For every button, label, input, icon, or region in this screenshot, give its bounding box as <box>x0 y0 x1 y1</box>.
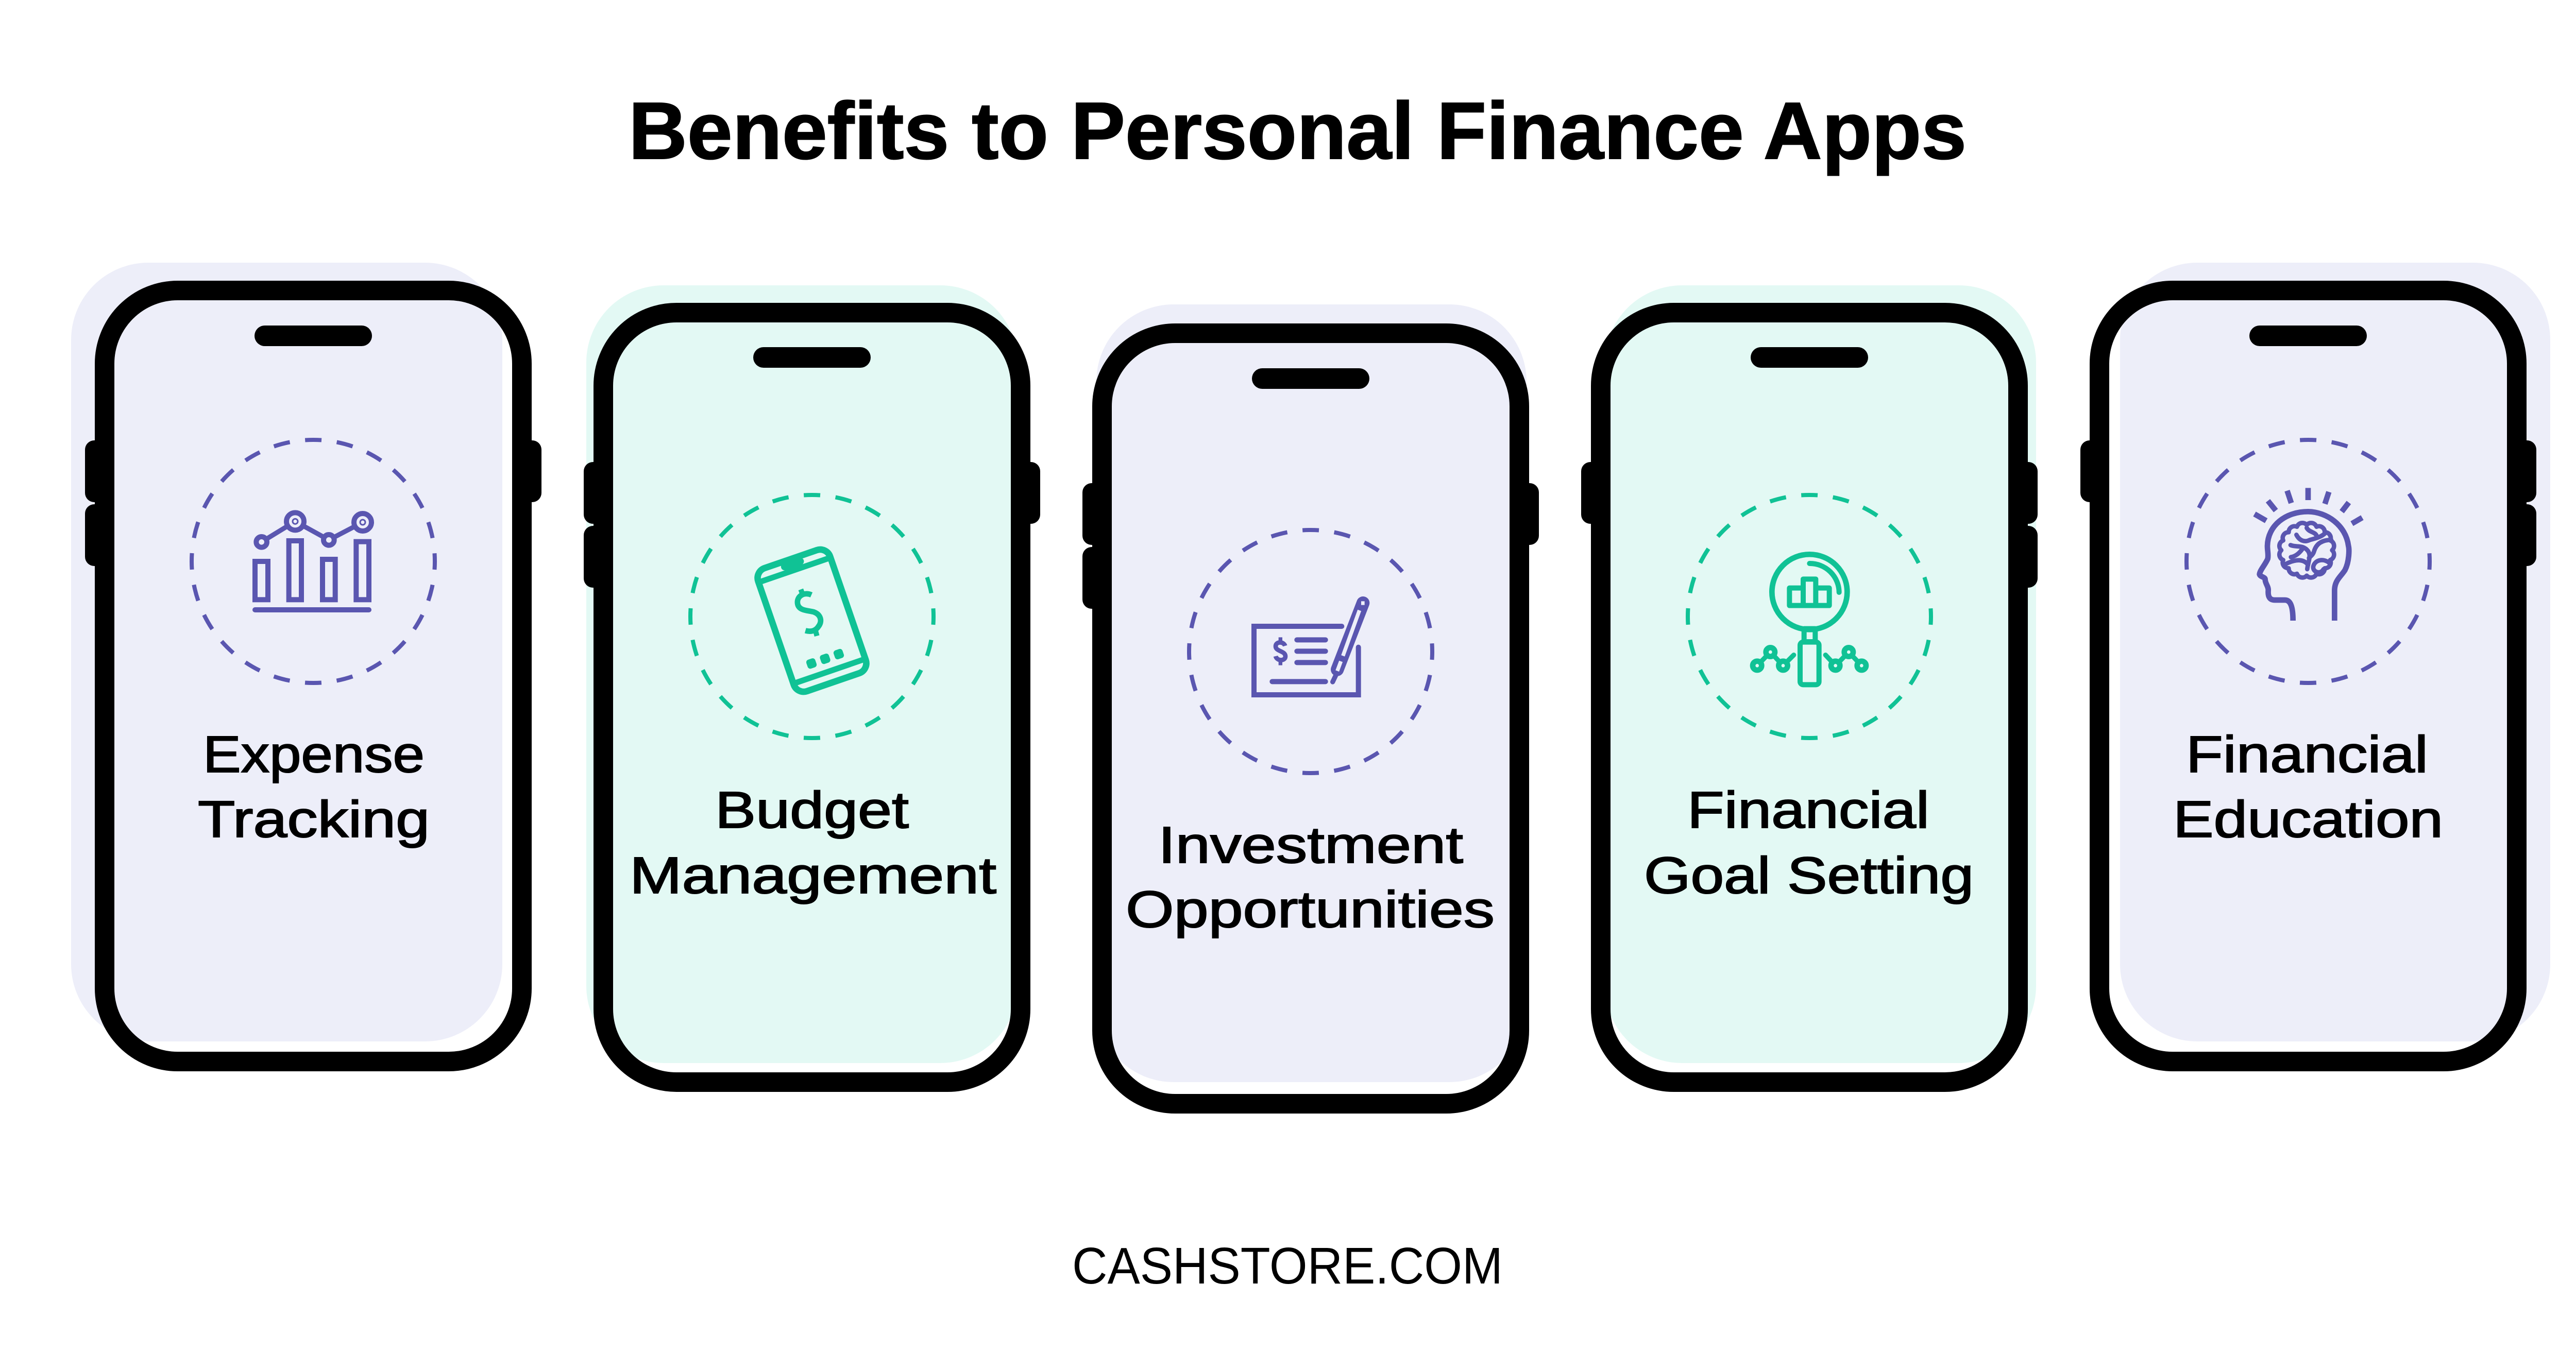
label: expense tracking <box>198 726 430 848</box>
phone 3 backdrop <box>1096 304 1527 1082</box>
phone 2 dashed circle <box>690 495 934 738</box>
footer: website: CASHSTORE.COM <box>1072 1237 1503 1295</box>
phone 4 side buttons <box>1581 462 2038 588</box>
phone 3 dashed circle <box>1189 530 1432 773</box>
phone 5 dashed circle <box>2187 440 2430 683</box>
phone 2 frame <box>603 313 1021 1082</box>
phone 1 notch <box>255 326 372 346</box>
phone 4 backdrop <box>1605 285 2036 1063</box>
phone 3 side buttons <box>1082 483 1539 609</box>
icon: magnifier over chart <box>1753 554 1866 684</box>
panel: investment opportunities phone <box>1082 304 1539 1104</box>
panel: budget management phone <box>584 285 1040 1082</box>
label: investment opportunities <box>1126 816 1495 938</box>
panel: financial education phone <box>2080 263 2550 1062</box>
phone 3 notch <box>1252 368 1369 389</box>
icon: cheque and pen <box>1254 603 1365 695</box>
label: budget management <box>630 781 996 904</box>
label: budget management: Management <box>630 847 996 904</box>
label: investment opportunities: Investment <box>1158 816 1463 874</box>
phone 5 notch <box>2249 326 2367 346</box>
icon: bar and line chart <box>255 512 371 610</box>
phone 5 backdrop <box>2120 263 2550 1041</box>
phone 1 side buttons <box>85 440 541 566</box>
phone 2 side buttons <box>584 462 1040 588</box>
label: expense tracking: Expense <box>203 726 425 783</box>
label: financial goal setting: Goal Setting <box>1644 847 1974 904</box>
label: financial goal setting <box>1644 781 1974 904</box>
label: financial education: Financial <box>2186 726 2428 783</box>
phone 3 frame <box>1102 333 1519 1104</box>
phone 4 frame <box>1601 313 2018 1082</box>
phone 5 side buttons <box>2080 440 2536 566</box>
panel: financial goal setting phone <box>1581 285 2038 1082</box>
panel: expense tracking phone <box>71 263 541 1062</box>
phone 4 notch <box>1751 347 1868 368</box>
phone 1 dashed circle <box>192 440 435 683</box>
phone 1 backdrop <box>71 263 502 1041</box>
phone 4 dashed circle <box>1688 495 1931 738</box>
label: expense tracking: Tracking <box>198 791 430 848</box>
label: budget management: Budget <box>715 781 909 839</box>
phone 5 frame <box>2099 290 2517 1062</box>
label: financial education <box>2173 726 2443 848</box>
label: investment opportunities: Opportunities <box>1126 881 1495 938</box>
label: financial goal setting: Financial <box>1687 781 1929 839</box>
phone 2 notch <box>753 347 871 368</box>
phone 1 frame <box>105 290 522 1062</box>
title: Benefits to Personal Finance Apps <box>629 86 1967 176</box>
label: financial education: Education <box>2173 791 2443 848</box>
phone 2 backdrop <box>586 285 1018 1063</box>
icon: head with brain <box>2255 488 2362 621</box>
icon: phone with dollar sign <box>755 546 869 695</box>
